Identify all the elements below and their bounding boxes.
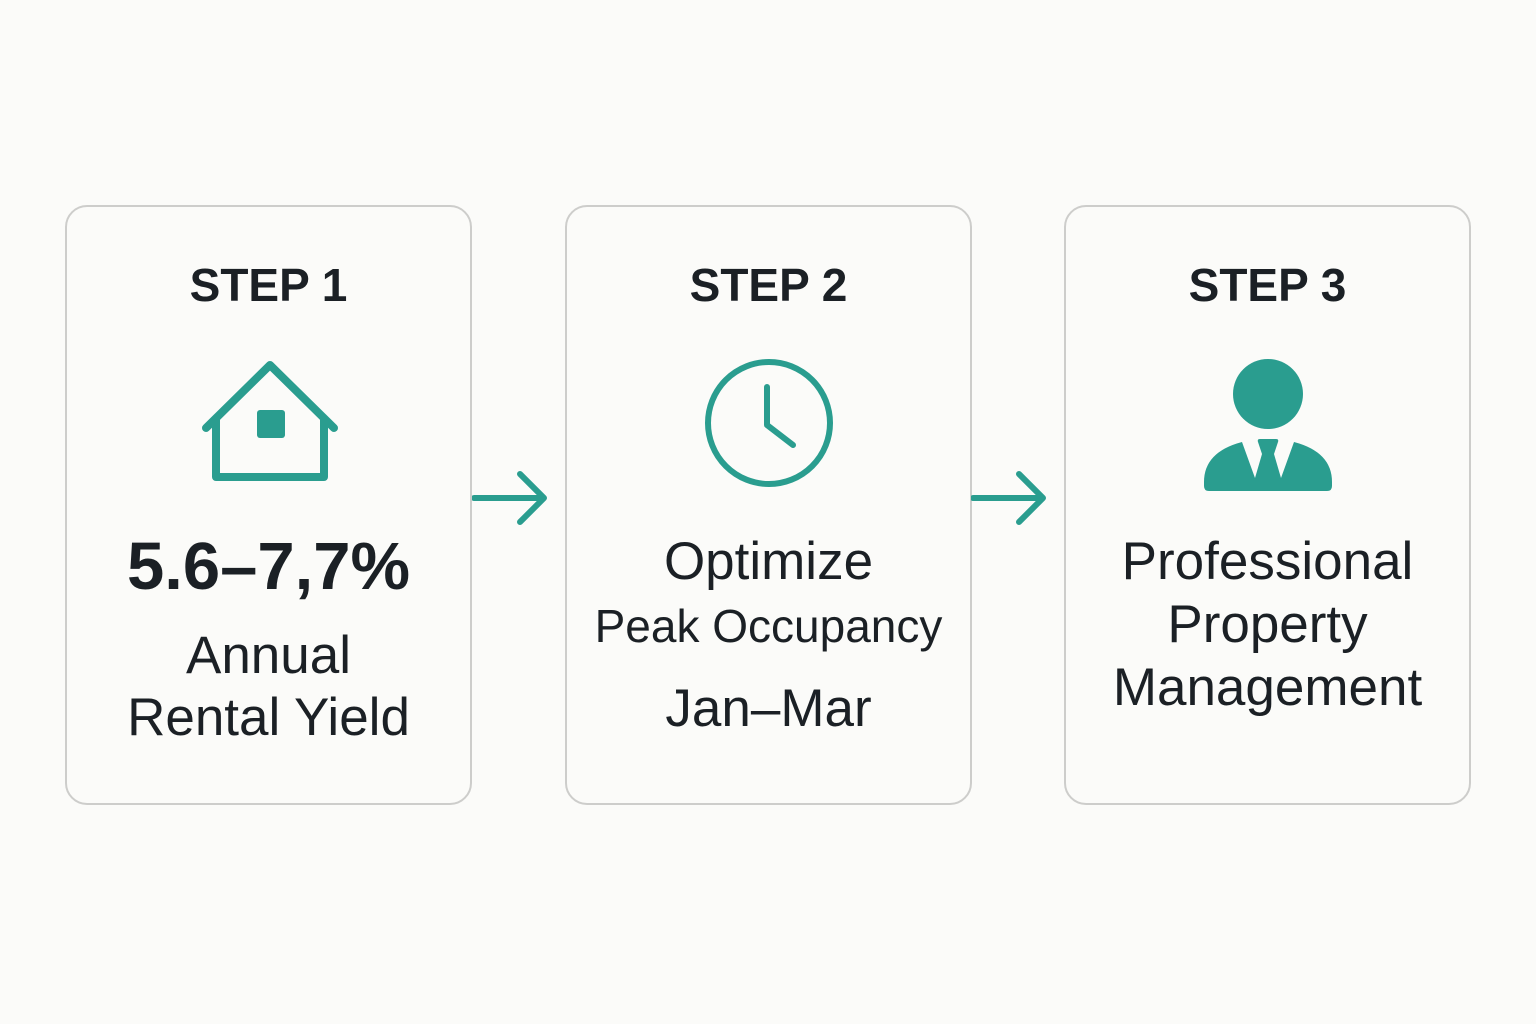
icon: clock xyxy=(705,359,833,487)
heading: step 2: STEP 2 xyxy=(690,259,847,311)
heading: step 3: STEP 3 xyxy=(1189,259,1346,311)
text: professional property management: Management xyxy=(1113,658,1422,717)
icon: house xyxy=(202,361,338,481)
arrow: 2 to 3 xyxy=(971,471,1046,525)
heading: step 1: STEP 1 xyxy=(190,259,347,311)
text: professional property management xyxy=(1113,532,1422,717)
text: annual rental yield: Rental Yield xyxy=(127,688,410,747)
panel: step 3 xyxy=(1064,205,1471,805)
icon: person xyxy=(1204,359,1332,491)
panel: step 1 xyxy=(65,205,472,805)
text: optimize: Optimize xyxy=(664,532,873,591)
text: annual rental yield: Annual xyxy=(186,626,351,685)
arrow: 1 to 2 xyxy=(472,471,547,525)
text: annual rental yield xyxy=(127,626,410,747)
text: peak occupancy: Peak Occupancy xyxy=(595,600,942,652)
text: jan-mar: Jan–Mar xyxy=(665,679,872,738)
text: professional property management: Professional xyxy=(1122,532,1413,591)
panel: step 2 xyxy=(565,205,972,805)
text: professional property management: Property xyxy=(1167,595,1368,654)
stat: yield: 5.6–7,7% xyxy=(127,529,410,604)
